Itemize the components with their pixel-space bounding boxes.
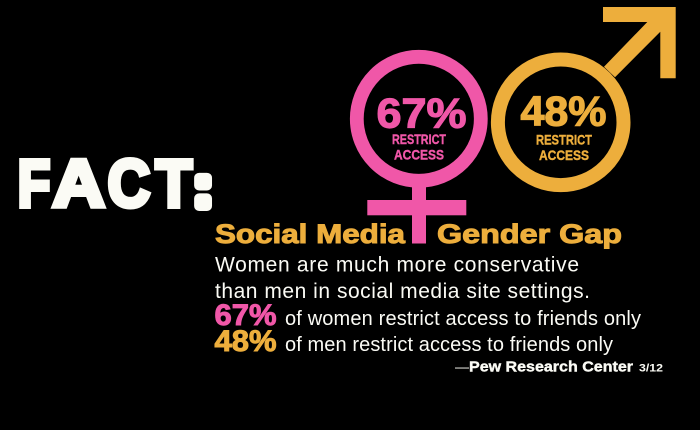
icon: female symbol with 67%: 67% [376, 90, 466, 136]
stat line: men 48% [214, 325, 613, 358]
heading: FACT [18, 146, 212, 221]
stat line: men 48%: 48% [214, 325, 276, 358]
heading: FACT: F [18, 146, 50, 221]
source credit: — [455, 359, 469, 375]
heading: FACT: A [52, 146, 105, 221]
title: Social Media Gender Gap: Gender Gap [437, 219, 622, 249]
heading: FACT: : [194, 155, 212, 218]
source credit: Pew Research Center [469, 359, 633, 376]
text block: summary: Women are much more conservative [215, 254, 579, 277]
source credit: 3/12 [639, 363, 663, 375]
stat line: men 48%: of men restrict access to friends only [285, 334, 613, 356]
stat line: women 67%: of women restrict access to friends only [285, 308, 641, 330]
title: Social Media Gender Gap: Social Media [215, 219, 406, 249]
text block: summary [215, 254, 590, 303]
text block: summary: than men in social media site settings. [215, 280, 590, 303]
icon: female symbol with 67%: ACCESS [394, 146, 444, 162]
icon: male symbol with 48%: RESTRICT [536, 132, 592, 148]
stat line: women 67% [214, 299, 641, 332]
icon: female symbol with 67%: RESTRICT [392, 131, 446, 147]
stat line: women 67%: 67% [214, 299, 276, 332]
heading: FACT: T [156, 147, 192, 221]
icon: male symbol with 48%: 48% [520, 88, 606, 134]
icon: female symbol with 67% [357, 57, 481, 244]
heading: FACT: C [108, 147, 150, 221]
icon: male symbol with 48% [498, 7, 676, 185]
title: Social Media Gender Gap [215, 219, 622, 249]
icon: male symbol with 48%: ACCESS [539, 147, 589, 163]
